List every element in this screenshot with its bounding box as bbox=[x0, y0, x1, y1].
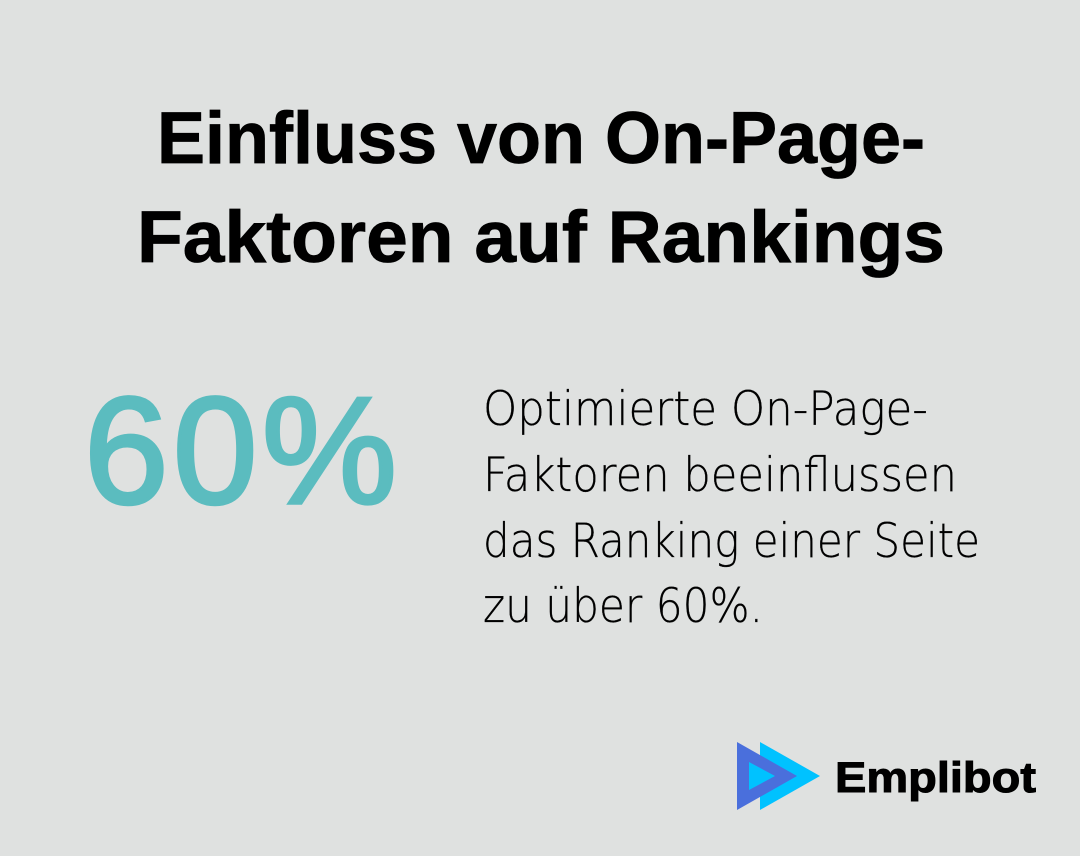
description text bbox=[483, 382, 980, 634]
logo: Emplibot bbox=[737, 742, 1036, 810]
title: Einfluss von On-Page- bbox=[157, 98, 925, 179]
title bbox=[137, 98, 945, 278]
description text: zu über 60%. bbox=[483, 579, 763, 634]
big statistic: 60%: 60% bbox=[84, 366, 397, 536]
description text: Faktoren beeinflussen bbox=[483, 448, 957, 503]
icon: play triangles bbox=[737, 742, 820, 810]
description text: Optimierte On-Page- bbox=[483, 382, 928, 437]
title: Faktoren auf Rankings bbox=[137, 197, 945, 278]
description text: das Ranking einer Seite bbox=[483, 514, 980, 569]
logo wordmark: Emplibot bbox=[835, 754, 1036, 802]
